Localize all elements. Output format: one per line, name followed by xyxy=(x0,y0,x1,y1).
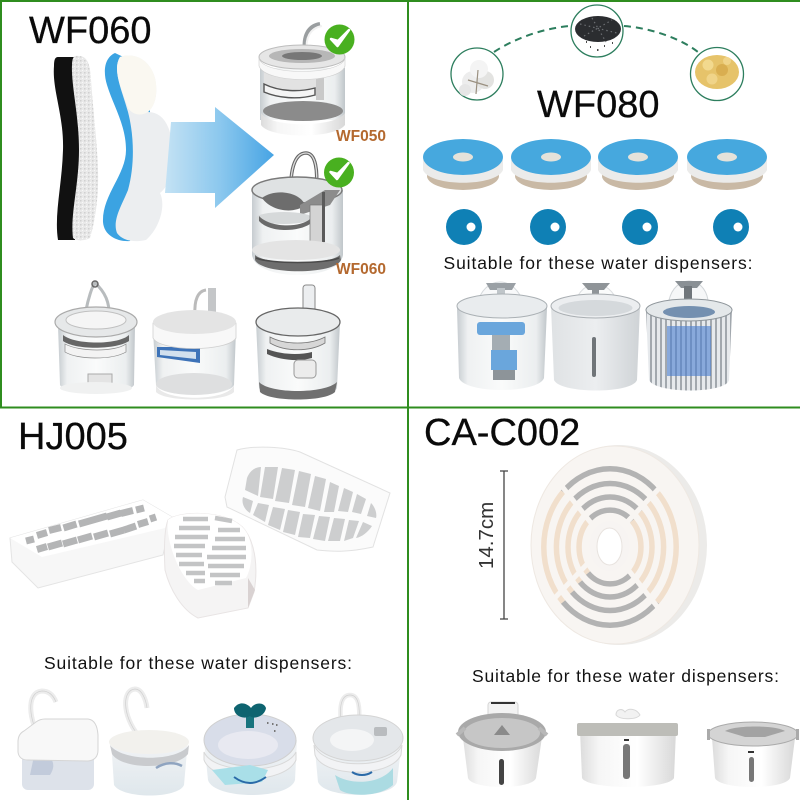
label: WF050: WF050 xyxy=(336,128,386,145)
fountain: compatible 3 xyxy=(256,285,340,400)
icon: cotton xyxy=(451,48,503,100)
fountain: white with window xyxy=(551,283,640,390)
filter: black and grey foam strip xyxy=(54,56,98,240)
fountain: white ribbed xyxy=(707,722,799,787)
icon: ion-exchange resin xyxy=(690,48,744,100)
small blue foam row xyxy=(446,209,749,245)
filter: blue foam and white cotton strip xyxy=(103,53,172,241)
panel: WF080 xyxy=(423,5,767,390)
fountain: ribbed blue xyxy=(646,281,732,390)
fountain: round with hook xyxy=(109,689,189,796)
fountain: white with level window xyxy=(577,709,678,787)
title: HJ005: HJ005 xyxy=(18,416,128,458)
caption: Suitable for these water dispensers: xyxy=(444,253,752,273)
title: WF080: WF080 xyxy=(537,84,659,126)
icon: activated carbon xyxy=(571,5,623,57)
dimension label: 14.7cm xyxy=(475,502,498,569)
fountain: WF050 xyxy=(259,24,345,136)
icon: green check 2 xyxy=(324,158,354,188)
caption: Suitable for these water dispensers: xyxy=(472,666,779,686)
fountain: compatible 1 xyxy=(55,281,137,394)
panel: HJ005 xyxy=(10,416,403,796)
fountain: square with hook xyxy=(18,691,98,790)
label: WF060: WF060 xyxy=(336,261,386,278)
dimension line xyxy=(500,471,508,619)
fountain: round white spout xyxy=(313,695,403,795)
icon: green check 1 xyxy=(324,24,354,54)
filter cartridge: middle xyxy=(164,513,256,618)
panel: WF060 xyxy=(29,10,386,400)
fountain: compatible 2 xyxy=(153,288,236,400)
title: WF060: WF060 xyxy=(29,10,151,52)
fountain: stainless bowl xyxy=(457,702,547,787)
fountain: blue leaf top xyxy=(204,703,297,795)
filter disc xyxy=(531,445,707,645)
filter cartridge: long left xyxy=(10,500,172,588)
fountain: WF060 xyxy=(252,153,343,275)
filter cartridge: wide right xyxy=(225,447,390,551)
panel: CA-C002 xyxy=(424,412,799,787)
fountain: clear with blue core xyxy=(457,282,547,390)
filter discs row xyxy=(423,139,767,190)
title: CA-C002: CA-C002 xyxy=(424,412,580,454)
arrow xyxy=(165,107,274,208)
dashed arc connecting materials xyxy=(494,26,698,52)
caption: Suitable for these water dispensers: xyxy=(44,653,352,673)
